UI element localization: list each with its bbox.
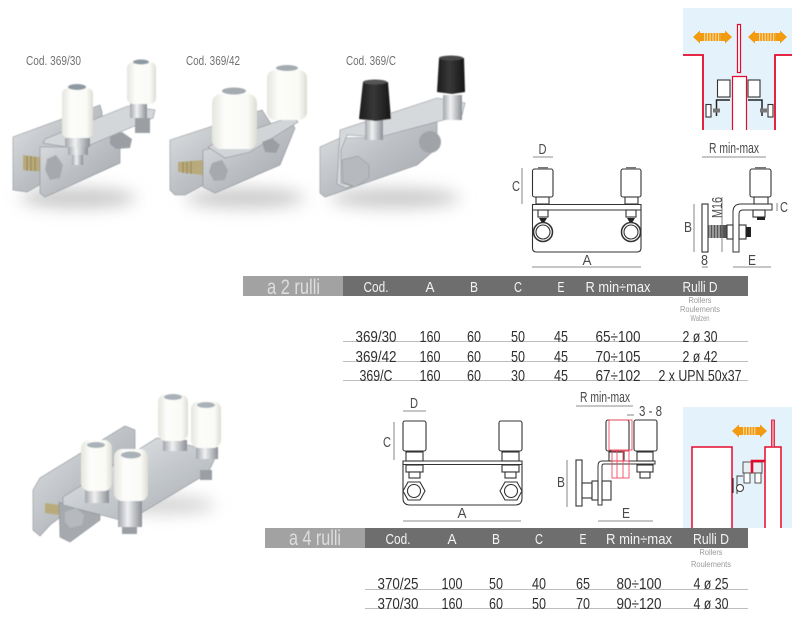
dimension: C: C bbox=[512, 179, 520, 195]
dimension: D: D bbox=[538, 142, 546, 158]
table header: a 2 rulli: A bbox=[426, 279, 434, 296]
table note: roller translations: Rollers bbox=[700, 548, 722, 557]
table rows: 2 rollers: 67÷102 bbox=[596, 368, 640, 385]
drawing: 4-roller front view bbox=[383, 396, 522, 522]
table rows: 4 rollers: 370/30 bbox=[378, 596, 419, 613]
table header: a 2 rulli: Rulli D bbox=[682, 279, 718, 296]
table header: a 2 rulli: E bbox=[558, 279, 564, 296]
table rows: 2 rollers: 50 bbox=[511, 329, 525, 346]
table rows: 2 rollers: 45 bbox=[554, 368, 568, 385]
table header: a 4 rulli: E bbox=[580, 531, 586, 548]
table header: a 2 rulli: R min÷max bbox=[586, 279, 651, 296]
table rows: 4 rollers: 60 bbox=[489, 596, 503, 613]
arrow: double arrow bbox=[732, 424, 767, 438]
table rows: 4 rollers: 160 bbox=[442, 596, 463, 613]
drawing: 4-roller side view bbox=[557, 390, 662, 522]
table rows: 2 rollers: 70÷105 bbox=[596, 349, 640, 366]
table header: a 4 rulli: R min÷max bbox=[606, 531, 672, 548]
label: Cod. 369/C: Cod. 369/C bbox=[346, 53, 396, 68]
table header: a 4 rulli: Rulli D bbox=[693, 531, 729, 548]
photo: 4-roller assembly bbox=[33, 394, 221, 542]
dimension: E: E bbox=[748, 253, 756, 269]
arrow: left double arrow bbox=[693, 30, 732, 44]
table rows: 2 rollers: 160 bbox=[420, 329, 441, 346]
label: Cod. 369/42: Cod. 369/42 bbox=[186, 53, 240, 68]
table header: a 2 rulli: B bbox=[470, 279, 478, 296]
label: Cod. 369/30: Cod. 369/30 bbox=[26, 53, 81, 68]
table rows: 4 rollers: 100 bbox=[442, 576, 463, 593]
table header: a 4 rulli: A bbox=[448, 531, 456, 548]
table rows: 4 rollers: 50 bbox=[489, 576, 503, 593]
table rows: 4 rollers: 70 bbox=[576, 596, 590, 613]
dimension: D: D bbox=[410, 396, 418, 412]
table header: a 4 rulli: Cod. bbox=[386, 531, 410, 548]
dimension: R min-max: R min-max bbox=[580, 390, 631, 406]
table rows: 4 rollers: 4 ø 30 bbox=[694, 596, 729, 613]
table header: a 2 rulli: C bbox=[514, 279, 522, 296]
table rows: 2 rollers: 160 bbox=[420, 349, 441, 366]
table rows: 2 rollers: 60 bbox=[467, 329, 481, 346]
table note: roller translations: Roulements bbox=[680, 305, 720, 314]
table rows: 4 rollers: 370/25 bbox=[378, 576, 418, 593]
table rows: 2 rollers: 160 bbox=[420, 368, 441, 385]
table rows: 4 rollers: 50 bbox=[532, 596, 546, 613]
table rows: 2 rollers: 2 ø 42 bbox=[682, 349, 718, 366]
drawing: 2-roller side view bbox=[684, 141, 788, 269]
table rows: 2 rollers: 369/42 bbox=[356, 349, 396, 366]
table rows: 2 rollers: 65÷100 bbox=[596, 329, 641, 346]
table header: a 2 rulli: Cod. bbox=[364, 279, 388, 296]
dimension: 3 - 8: 3 - 8 bbox=[639, 404, 662, 420]
table header: a 4 rulli: a 4 rulli bbox=[289, 527, 341, 550]
dimension: A: A bbox=[582, 253, 592, 269]
photo: roller assembly 369/42 bbox=[170, 65, 307, 208]
table rows: 4 rollers: 65 bbox=[576, 576, 590, 593]
dimension: E: E bbox=[622, 506, 630, 522]
table rows: 2 rollers: 369/30 bbox=[356, 329, 397, 346]
table rows: 2 rollers: 45 bbox=[554, 329, 568, 346]
table rows: 2 rollers: 30 bbox=[511, 368, 525, 385]
table rows: 4 rollers: 40 bbox=[532, 576, 546, 593]
table rows: 2 rollers: 50 bbox=[511, 349, 525, 366]
dimension: B: B bbox=[557, 475, 565, 491]
table note: roller translations: Roulements bbox=[691, 560, 731, 569]
table rows: 4 rollers: 90÷120 bbox=[616, 596, 662, 613]
dimension: small C: C bbox=[780, 200, 788, 216]
dimension: C: C bbox=[383, 435, 391, 451]
dimension: B: B bbox=[684, 220, 692, 236]
table rows: 4 rollers: 4 ø 25 bbox=[694, 576, 728, 593]
arrow: right double arrow bbox=[748, 30, 787, 44]
table note: roller translations bbox=[691, 548, 731, 569]
table rows: 4 rollers bbox=[365, 576, 748, 613]
dimension: A: A bbox=[458, 506, 467, 522]
table header: a 4 rulli: B bbox=[492, 531, 500, 548]
table note: roller translations: Rollers bbox=[688, 296, 712, 305]
table header: a 2 rulli: a 2 rulli bbox=[267, 276, 320, 299]
dimension: R min-max: R min-max bbox=[709, 141, 760, 157]
table rows: 2 rollers bbox=[343, 329, 748, 385]
table rows: 4 rollers: 80÷100 bbox=[616, 576, 662, 593]
table rows: 2 rollers: 2 x UPN 50x37 bbox=[658, 368, 742, 385]
drawing: 2-roller front view bbox=[512, 142, 641, 269]
dimension: M16: M16 bbox=[710, 197, 726, 218]
table rows: 2 rollers: 369/C bbox=[360, 368, 392, 385]
table note: roller translations: Walzen bbox=[690, 314, 710, 323]
table header: a 4 rulli: C bbox=[535, 531, 543, 548]
diagram: top-right installation section bbox=[683, 8, 792, 130]
table rows: 2 rollers: 60 bbox=[467, 368, 481, 385]
table header: a 2 rulli bbox=[243, 276, 748, 299]
photo: roller assembly 369/30 bbox=[13, 60, 156, 208]
table rows: 2 rollers: 2 ø 30 bbox=[682, 329, 718, 346]
table header: a 4 rulli bbox=[265, 527, 748, 550]
photo: roller assembly 369/C bbox=[320, 56, 465, 208]
table rows: 2 rollers: 45 bbox=[554, 349, 568, 366]
table note: roller translations bbox=[680, 296, 720, 323]
diagram: lower-right installation section bbox=[683, 407, 792, 528]
table rows: 2 rollers: 60 bbox=[467, 349, 481, 366]
dimension: 8: 8 bbox=[701, 253, 708, 269]
